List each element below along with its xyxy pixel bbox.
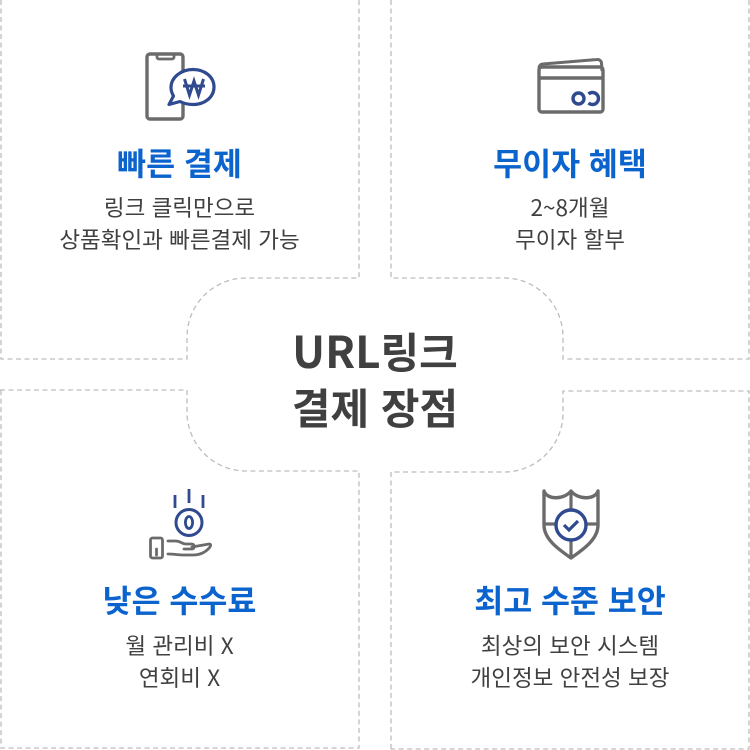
center title [292, 317, 458, 437]
icon: phone with won speech bubble [145, 52, 216, 121]
text: 최고 수준 보안 description [471, 629, 669, 693]
center title: 결제 장점 [292, 376, 458, 437]
text: 낮은 수수료 description: 월 관리비 X [125, 629, 234, 661]
icon: wallet card [537, 58, 605, 114]
text: 무이자 혜택 description [515, 191, 625, 255]
heading: 낮은 수수료: 낮은 수수료 [103, 576, 256, 622]
icon: coin over hand [149, 489, 212, 560]
text: 최고 수준 보안 description: 최상의 보안 시스템 [481, 629, 659, 661]
center title: URL링크 [292, 317, 458, 381]
text: 최고 수준 보안 description: 개인정보 안전성 보장 [471, 661, 669, 693]
text: 무이자 혜택 description: 2~8개월 [531, 191, 609, 223]
text: 빠른 결제 description: 상품확인과 빠른결제 가능 [59, 223, 300, 255]
text: 무이자 혜택 description: 무이자 할부 [515, 223, 625, 255]
heading: 무이자 혜택: 무이자 혜택 [493, 139, 647, 185]
icon: shield with check [542, 489, 600, 560]
text: 빠른 결제 description [59, 191, 300, 255]
heading: 빠른 결제: 빠른 결제 [117, 139, 242, 185]
text: 낮은 수수료 description: 연회비 X [139, 661, 220, 693]
text: 낮은 수수료 description [125, 629, 234, 693]
heading: 최고 수준 보안: 최고 수준 보안 [474, 576, 666, 622]
text: 빠른 결제 description: 링크 클릭만으로 [104, 191, 255, 223]
